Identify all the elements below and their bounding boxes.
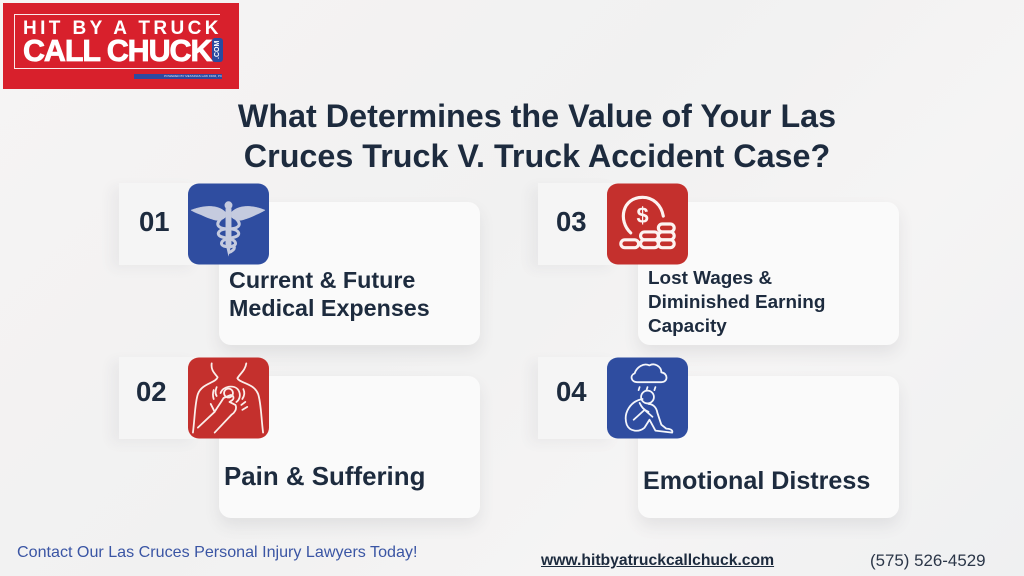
label 01: Current & Future: [229, 267, 415, 293]
number 01: 01: [139, 206, 170, 237]
icon: medical caduceus: [188, 184, 269, 264]
panel: factor 04: [536, 358, 900, 526]
number tab 03: [538, 183, 618, 265]
dollar sign: $: [637, 203, 649, 228]
title: Cruces Truck V. Truck Accident Case?: [244, 138, 830, 174]
panel: factor 02: [117, 358, 480, 526]
logo frame: [14, 14, 220, 69]
label 04: Emotional Distress: [643, 467, 870, 495]
number 03: 03: [556, 206, 587, 237]
card 03: [638, 202, 899, 345]
logo dot com badge: [212, 38, 223, 62]
icon: chest pain: [188, 358, 269, 438]
logo: [3, 3, 239, 89]
number tab 01: [119, 183, 199, 265]
website link: www.hitbyatruckcallchuck.com: [541, 552, 774, 569]
title: What Determines the Value of Your Las: [238, 98, 836, 134]
icon: coins: [607, 184, 688, 264]
contact call to action: Contact Our Las Cruces Personal Injury Lawyers Today!: [17, 543, 417, 561]
panel: factor 01: [117, 184, 480, 354]
number tab 02: [119, 357, 199, 439]
label 03: [648, 268, 825, 337]
logo tagline bar: [134, 74, 222, 79]
label 02: Pain & Suffering: [224, 463, 425, 491]
icon: person under rain cloud: [607, 358, 688, 438]
number tab 04: [538, 357, 618, 439]
label 03: Diminished Earning: [648, 292, 825, 313]
logo tagline bar: POWERED BY MESSINAS LAW FIRM, PC: [164, 74, 222, 78]
phone number: (575) 526-4529: [870, 551, 986, 570]
logo dot com badge: .COM: [214, 41, 221, 59]
card 01: [219, 202, 480, 345]
number 02: 02: [136, 376, 167, 407]
card 02: [219, 376, 480, 518]
logo line one: HIT BY A TRUCK: [23, 18, 222, 39]
label 03: Capacity: [648, 316, 727, 337]
number 04: 04: [556, 376, 587, 407]
label 03: Lost Wages &: [648, 268, 772, 289]
logo line two: CALL CHUCK: [23, 34, 211, 68]
label 01: [229, 267, 430, 321]
label 01: Medical Expenses: [229, 295, 430, 321]
card 04: [638, 376, 899, 518]
panel: factor 03: [536, 184, 900, 354]
title: [238, 98, 836, 174]
